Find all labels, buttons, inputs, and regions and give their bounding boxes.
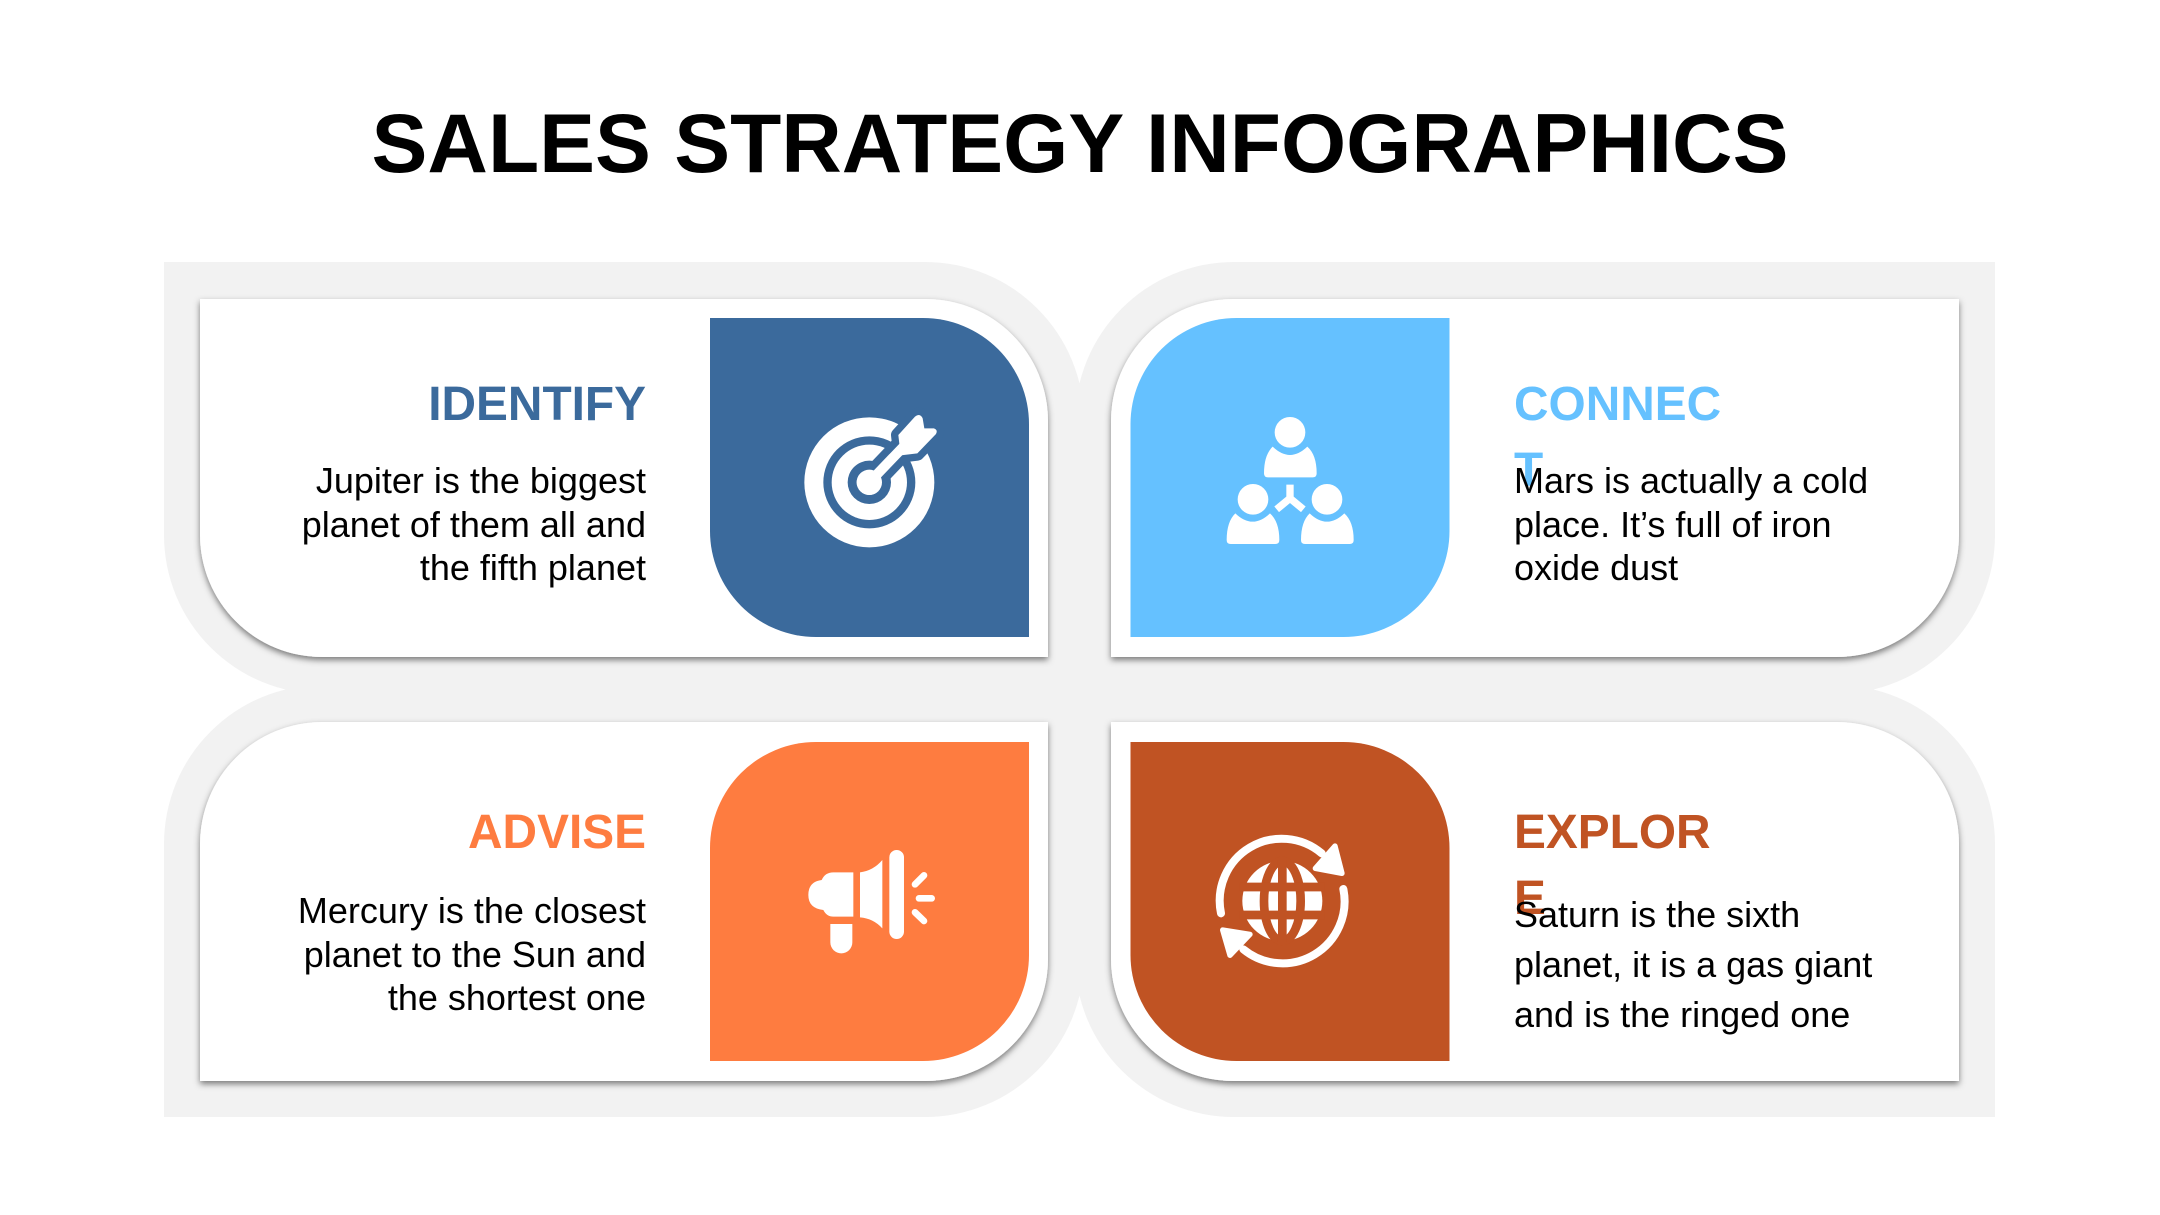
colour block: explore	[1130, 742, 1450, 1061]
colour block: connect	[1130, 318, 1450, 637]
card: advise	[200, 722, 1048, 1081]
heading: explore: E	[1514, 872, 1546, 925]
panel: advise	[200, 722, 1048, 1081]
heading: connect: T	[1514, 444, 1543, 497]
body: explore: and is the ringed one	[1514, 994, 1850, 1035]
body: identify: the fifth planet	[420, 547, 646, 588]
panel: connect	[1111, 299, 1959, 657]
body: identify: planet of them all and	[302, 504, 646, 545]
panel: identify	[200, 299, 1048, 657]
panel: explore	[1111, 722, 1959, 1081]
body: advise: the shortest one	[388, 977, 646, 1018]
title: SALES STRATEGY INFOGRAPHICS	[372, 96, 1788, 190]
icon: globe with rotating arrows	[1220, 839, 1345, 963]
heading: connect: CONNEC	[1514, 378, 1721, 431]
body: advise: Mercury is the closest	[298, 890, 646, 931]
heading: explore: EXPLOR	[1514, 806, 1711, 859]
gray backdrop panels	[164, 262, 1995, 1117]
heading: advise: ADVISE	[468, 806, 646, 859]
heading: identify: IDENTIFY	[428, 378, 646, 431]
body: advise: planet to the Sun and	[304, 934, 646, 975]
body: explore: planet, it is a gas giant	[1514, 944, 1872, 985]
colour block: identify	[710, 318, 1029, 637]
body: connect: place. It’s full of iron	[1514, 504, 1832, 545]
icon: target with arrow	[804, 415, 937, 547]
body: connect: oxide dust	[1514, 547, 1678, 588]
card: explore	[1111, 722, 1959, 1081]
body: connect: Mars is actually a cold	[1514, 460, 1868, 501]
icon: connected people	[1227, 417, 1354, 544]
colour block: advise	[710, 742, 1029, 1061]
card: connect	[1111, 299, 1959, 657]
body: explore: Saturn is the sixth	[1514, 894, 1800, 935]
icon: megaphone	[808, 850, 932, 953]
card: identify	[200, 299, 1048, 657]
body: identify: Jupiter is the biggest	[316, 460, 646, 501]
